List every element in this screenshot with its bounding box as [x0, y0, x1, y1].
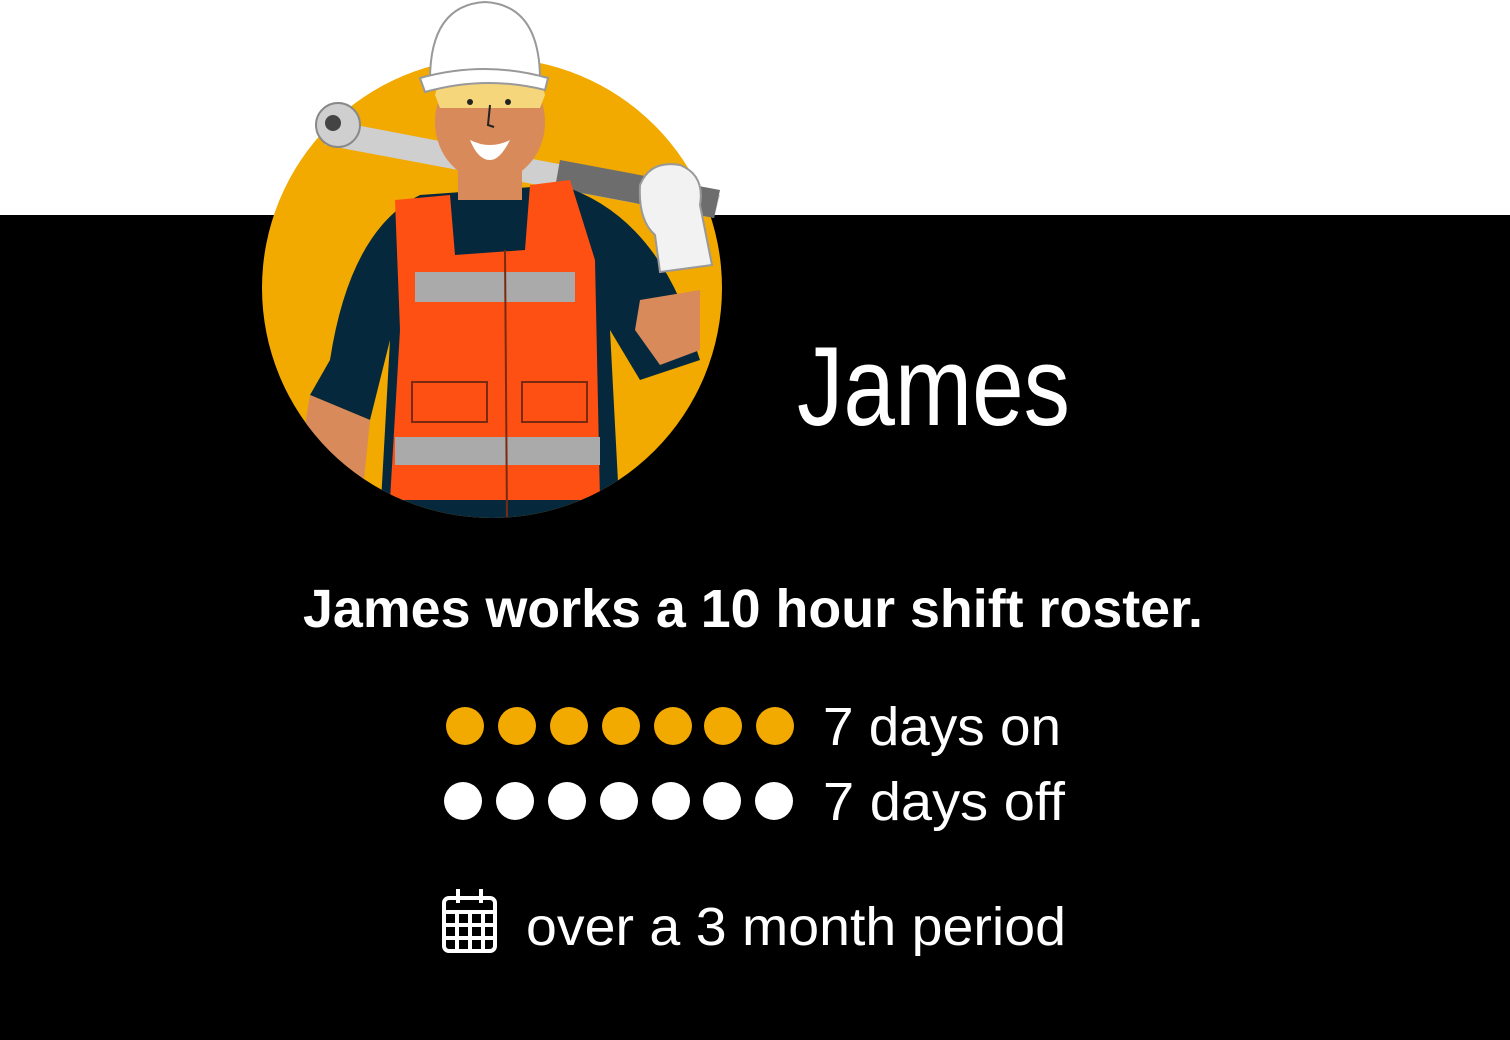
- body/shirt: [310, 185, 700, 520]
- days on row: [446, 707, 794, 745]
- name heading: James: [797, 324, 1070, 449]
- arms skin: [306, 395, 370, 479]
- helmet: [430, 2, 540, 80]
- glove: [640, 164, 712, 272]
- days off label: 7 days off: [823, 772, 1066, 832]
- icon: calendar: [444, 889, 495, 951]
- white top band: [0, 0, 1510, 215]
- illustration: worker in circle: [262, 2, 722, 520]
- days on label: 7 days on: [823, 697, 1061, 757]
- days off row: [444, 782, 793, 820]
- subtitle: James works a 10 hour shift roster.: [303, 579, 1203, 639]
- wrench: [325, 120, 720, 218]
- period label: over a 3 month period: [526, 897, 1066, 957]
- neck and face: [458, 170, 522, 200]
- vest: [390, 180, 600, 500]
